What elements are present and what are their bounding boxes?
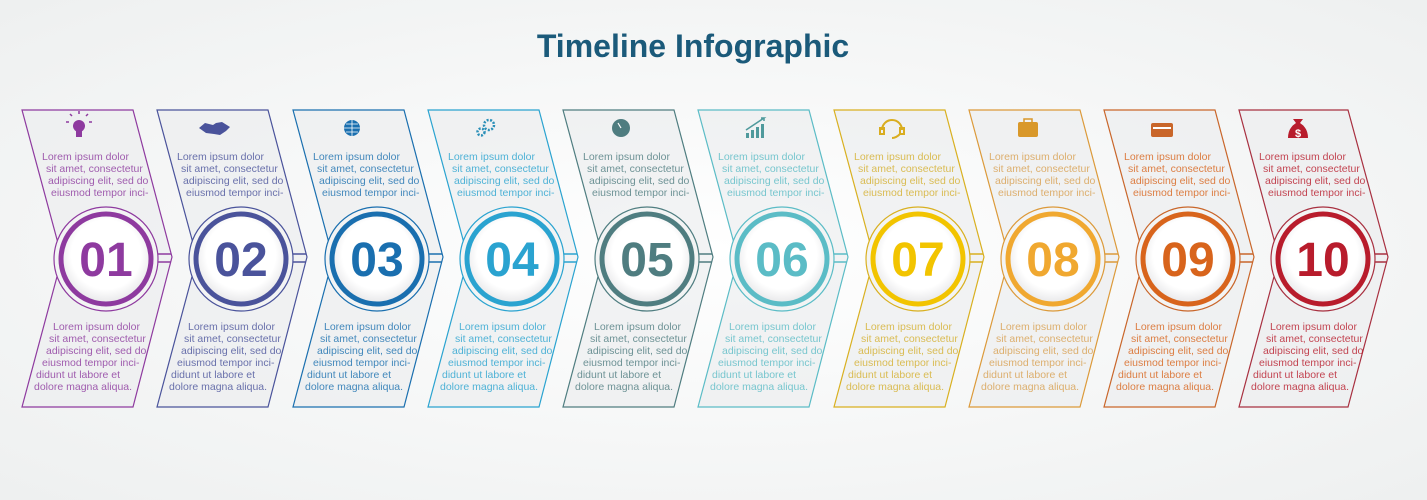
- text: bottom: dolore magna aliqua.: [169, 381, 267, 393]
- text: bottom: sit amet, consectetur: [1131, 333, 1228, 345]
- text: bottom: adipiscing elit, sed do: [317, 345, 418, 357]
- panel: step 08: [969, 110, 1119, 407]
- text: bottom: sit amet, consectetur: [320, 333, 417, 345]
- text: bottom: adipiscing elit, sed do: [858, 345, 959, 357]
- panel: step 06: [698, 110, 848, 407]
- number: 01: [79, 234, 133, 287]
- text: bottom: didunt ut labore et: [848, 369, 932, 381]
- text: bottom: adipiscing elit, sed do: [587, 345, 688, 357]
- text: top: [1259, 151, 1366, 199]
- text: top: sit amet, consectetur: [993, 163, 1090, 175]
- text: bottom: Lorem ipsum dolor: [1000, 321, 1087, 333]
- number: 02: [214, 234, 268, 287]
- number: 05: [620, 234, 674, 287]
- text: top: adipiscing elit, sed do: [724, 175, 825, 187]
- text: bottom: Lorem ipsum dolor: [53, 321, 140, 333]
- text: bottom: didunt ut labore et: [442, 369, 526, 381]
- text: top: sit amet, consectetur: [587, 163, 684, 175]
- text: top: Lorem ipsum dolor: [177, 151, 264, 163]
- panel: step 05: [563, 110, 713, 407]
- text: top: [448, 151, 555, 199]
- text: top: Lorem ipsum dolor: [1124, 151, 1211, 163]
- text: bottom: adipiscing elit, sed do: [1263, 345, 1364, 357]
- text: bottom: eiusmod tempor inci-: [1124, 357, 1222, 369]
- text: bottom: Lorem ipsum dolor: [1135, 321, 1222, 333]
- text: bottom: adipiscing elit, sed do: [181, 345, 282, 357]
- panel: step 04: [428, 110, 578, 407]
- text: bottom: Lorem ipsum dolor: [729, 321, 816, 333]
- icon: money bag: $: [1295, 128, 1301, 140]
- icon: credit card: [1151, 123, 1173, 137]
- text: top: sit amet, consectetur: [46, 163, 143, 175]
- text: top: Lorem ipsum dolor: [313, 151, 400, 163]
- number: 07: [891, 234, 945, 287]
- text: bottom: [846, 321, 959, 393]
- text: bottom: sit amet, consectetur: [184, 333, 281, 345]
- text: bottom: sit amet, consectetur: [861, 333, 958, 345]
- text: top: adipiscing elit, sed do: [995, 175, 1096, 187]
- icon: globe: [344, 120, 360, 136]
- icon: briefcase: [1018, 119, 1038, 137]
- text: bottom: [710, 321, 823, 393]
- text: bottom: Lorem ipsum dolor: [865, 321, 952, 333]
- text: bottom: [1116, 321, 1229, 393]
- text: top: eiusmod tempor inci-: [592, 187, 690, 199]
- text: bottom: adipiscing elit, sed do: [1128, 345, 1229, 357]
- text: bottom: sit amet, consectetur: [455, 333, 552, 345]
- text: bottom: [305, 321, 418, 393]
- text: top: sit amet, consectetur: [1128, 163, 1225, 175]
- panel: step 07: [834, 110, 984, 407]
- text: bottom: Lorem ipsum dolor: [324, 321, 411, 333]
- text: bottom: [575, 321, 688, 393]
- number: 06: [755, 234, 809, 287]
- icon: headset: [880, 120, 904, 138]
- text: top: eiusmod tempor inci-: [457, 187, 555, 199]
- text: top: adipiscing elit, sed do: [183, 175, 284, 187]
- text: bottom: [440, 321, 553, 393]
- text: bottom: dolore magna aliqua.: [1116, 381, 1214, 393]
- panel: step 02: [157, 110, 307, 407]
- text: top: [313, 151, 420, 199]
- text: top: eiusmod tempor inci-: [1133, 187, 1231, 199]
- text: bottom: didunt ut labore et: [1118, 369, 1202, 381]
- text: bottom: dolore magna aliqua.: [575, 381, 673, 393]
- text: bottom: eiusmod tempor inci-: [718, 357, 816, 369]
- text: bottom: dolore magna aliqua.: [34, 381, 132, 393]
- text: top: eiusmod tempor inci-: [186, 187, 284, 199]
- text: top: Lorem ipsum dolor: [1259, 151, 1346, 163]
- text: bottom: [34, 321, 147, 393]
- panel: step 01: [22, 110, 172, 407]
- text: bottom: sit amet, consectetur: [590, 333, 687, 345]
- text: bottom: eiusmod tempor inci-: [854, 357, 952, 369]
- text: bottom: [1251, 321, 1364, 393]
- text: top: eiusmod tempor inci-: [1268, 187, 1366, 199]
- text: bottom: didunt ut labore et: [171, 369, 255, 381]
- text: top: Lorem ipsum dolor: [583, 151, 670, 163]
- text: top: eiusmod tempor inci-: [727, 187, 825, 199]
- title: Timeline Infographic: [537, 28, 849, 64]
- text: top: eiusmod tempor inci-: [863, 187, 961, 199]
- text: top: adipiscing elit, sed do: [454, 175, 555, 187]
- text: top: sit amet, consectetur: [452, 163, 549, 175]
- text: bottom: [981, 321, 1094, 393]
- text: bottom: dolore magna aliqua.: [1251, 381, 1349, 393]
- text: top: eiusmod tempor inci-: [998, 187, 1096, 199]
- text: bottom: eiusmod tempor inci-: [1259, 357, 1357, 369]
- text: top: eiusmod tempor inci-: [51, 187, 149, 199]
- text: top: sit amet, consectetur: [858, 163, 955, 175]
- text: top: [583, 151, 690, 199]
- number: 09: [1161, 234, 1215, 287]
- text: top: [718, 151, 825, 199]
- panel: step 03: [293, 110, 443, 407]
- text: bottom: sit amet, consectetur: [725, 333, 822, 345]
- text: bottom: sit amet, consectetur: [996, 333, 1093, 345]
- text: top: sit amet, consectetur: [181, 163, 278, 175]
- text: top: eiusmod tempor inci-: [322, 187, 420, 199]
- text: top: adipiscing elit, sed do: [1130, 175, 1231, 187]
- number: 04: [485, 234, 539, 287]
- text: bottom: didunt ut labore et: [36, 369, 120, 381]
- text: top: Lorem ipsum dolor: [989, 151, 1076, 163]
- text: top: sit amet, consectetur: [317, 163, 414, 175]
- text: bottom: adipiscing elit, sed do: [993, 345, 1094, 357]
- text: top: Lorem ipsum dolor: [854, 151, 941, 163]
- number: 10: [1296, 234, 1350, 287]
- text: bottom: [169, 321, 282, 393]
- text: bottom: didunt ut labore et: [712, 369, 796, 381]
- panel: step 09: [1104, 110, 1254, 407]
- text: top: [177, 151, 284, 199]
- icon: chart: [746, 118, 764, 138]
- icon: gears: [478, 120, 494, 136]
- text: bottom: didunt ut labore et: [1253, 369, 1337, 381]
- text: bottom: dolore magna aliqua.: [305, 381, 403, 393]
- text: top: [854, 151, 961, 199]
- text: top: adipiscing elit, sed do: [1265, 175, 1366, 187]
- text: bottom: dolore magna aliqua.: [846, 381, 944, 393]
- text: bottom: sit amet, consectetur: [49, 333, 146, 345]
- text: bottom: eiusmod tempor inci-: [989, 357, 1087, 369]
- text: top: Lorem ipsum dolor: [42, 151, 129, 163]
- text: bottom: eiusmod tempor inci-: [583, 357, 681, 369]
- text: bottom: adipiscing elit, sed do: [722, 345, 823, 357]
- text: top: adipiscing elit, sed do: [589, 175, 690, 187]
- text: bottom: dolore magna aliqua.: [981, 381, 1079, 393]
- text: top: Lorem ipsum dolor: [448, 151, 535, 163]
- text: top: sit amet, consectetur: [722, 163, 819, 175]
- text: bottom: eiusmod tempor inci-: [42, 357, 140, 369]
- panel: step 10: [1239, 110, 1388, 407]
- text: bottom: adipiscing elit, sed do: [452, 345, 553, 357]
- text: bottom: didunt ut labore et: [983, 369, 1067, 381]
- text: bottom: adipiscing elit, sed do: [46, 345, 147, 357]
- text: bottom: Lorem ipsum dolor: [1270, 321, 1357, 333]
- text: bottom: Lorem ipsum dolor: [459, 321, 546, 333]
- text: bottom: Lorem ipsum dolor: [594, 321, 681, 333]
- text: top: sit amet, consectetur: [1263, 163, 1360, 175]
- icon: handshake: [199, 122, 230, 135]
- text: bottom: sit amet, consectetur: [1266, 333, 1363, 345]
- text: bottom: eiusmod tempor inci-: [448, 357, 546, 369]
- text: top: adipiscing elit, sed do: [319, 175, 420, 187]
- text: bottom: Lorem ipsum dolor: [188, 321, 275, 333]
- text: top: adipiscing elit, sed do: [48, 175, 149, 187]
- icon: lightbulb: [66, 111, 92, 137]
- icon: money bag: [1288, 119, 1308, 140]
- text: bottom: eiusmod tempor inci-: [177, 357, 275, 369]
- text: bottom: dolore magna aliqua.: [710, 381, 808, 393]
- number: 03: [350, 234, 404, 287]
- text: top: [989, 151, 1096, 199]
- number: 08: [1026, 234, 1080, 287]
- text: top: [42, 151, 149, 199]
- text: bottom: didunt ut labore et: [577, 369, 661, 381]
- text: top: Lorem ipsum dolor: [718, 151, 805, 163]
- text: top: adipiscing elit, sed do: [860, 175, 961, 187]
- text: bottom: eiusmod tempor inci-: [313, 357, 411, 369]
- text: top: [1124, 151, 1231, 199]
- text: bottom: didunt ut labore et: [307, 369, 391, 381]
- text: bottom: dolore magna aliqua.: [440, 381, 538, 393]
- icon: clock: [612, 119, 630, 137]
